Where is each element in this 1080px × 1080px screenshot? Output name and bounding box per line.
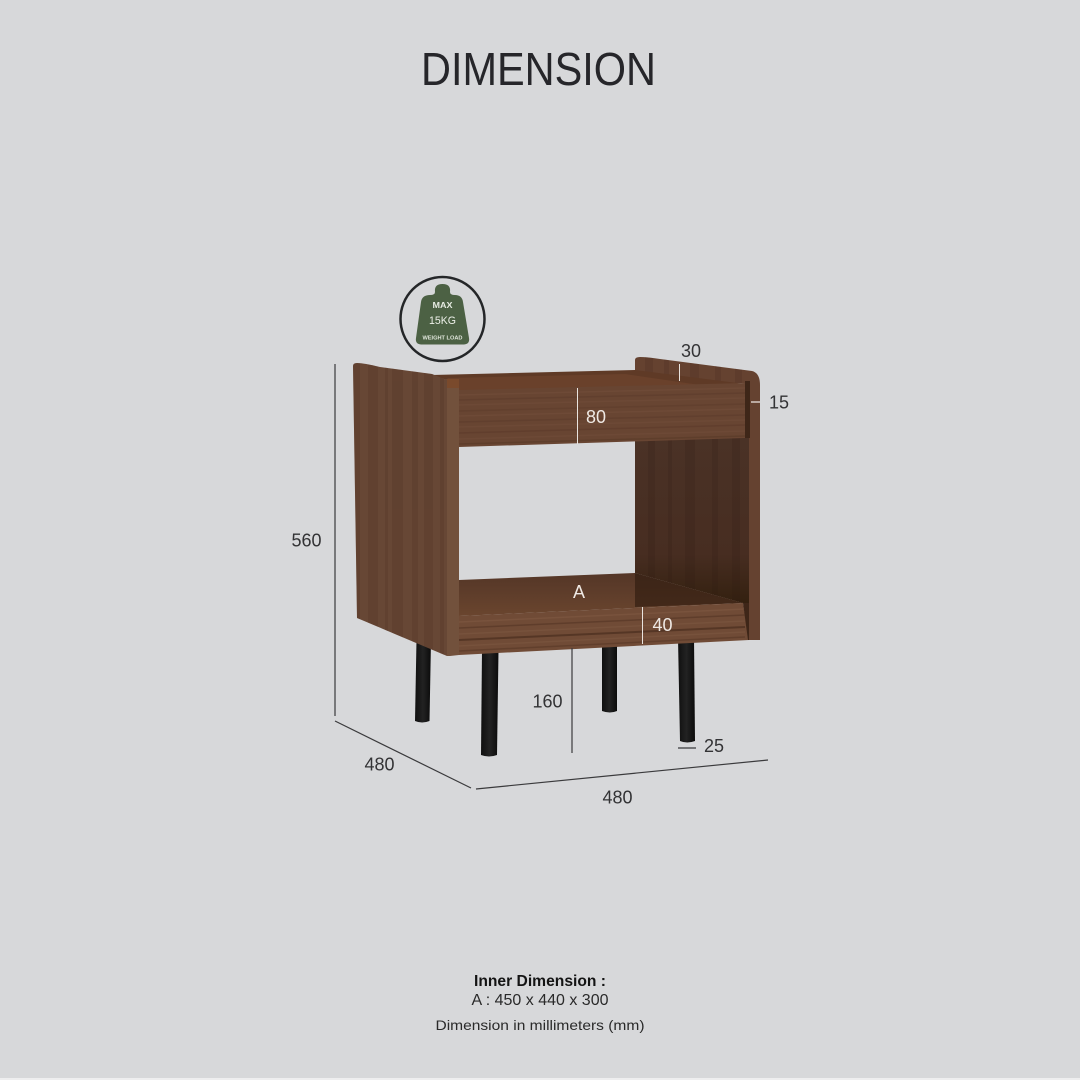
dimension lines: [335, 364, 768, 789]
inner dimension heading: Inner Dimension :: [474, 973, 606, 990]
left panel front edge: [447, 379, 459, 656]
back panel and right side panel: [635, 355, 760, 640]
leg height line: [571, 648, 573, 753]
leg diameter line: [678, 747, 696, 749]
bottom edge strip: [0, 1078, 1080, 1080]
dimension labels: [291, 341, 789, 808]
lower shelf top: [459, 573, 743, 616]
units note: Dimension in millimeters (mm): [436, 1017, 644, 1033]
leg: front left: [481, 650, 498, 756]
icon: weight: [416, 284, 469, 344]
leg: back left: [415, 640, 431, 722]
badge text: weight load: WEIGHT LOAD: [422, 336, 463, 342]
inner dimension values: A : 450 x 440 x 300: [472, 992, 609, 1009]
label: 25: 25: [704, 736, 724, 756]
panel thickness line: [751, 401, 760, 403]
shelf end shadow: [743, 603, 749, 640]
depth line: [335, 721, 471, 788]
label: 40: 40: [652, 615, 673, 635]
legs: [415, 638, 695, 756]
top rail height line: [678, 364, 680, 381]
inner back wall: [635, 436, 750, 606]
top drawer front: [459, 381, 750, 447]
left side panel: [353, 360, 447, 660]
badge text: max: MAX: [432, 301, 453, 310]
lower shelf front: [459, 603, 749, 655]
height line: [334, 364, 336, 716]
title: DIMENSION: [421, 43, 656, 95]
shelf height line: [642, 607, 644, 644]
drawer height line: [576, 388, 578, 444]
label: 80: 80: [586, 407, 606, 427]
badge ring: [400, 277, 484, 361]
badge text: 15kg: 15KG: [429, 315, 456, 327]
leg: back right: [602, 642, 617, 712]
label: 30: 30: [681, 341, 701, 361]
nightstand product illustration: [353, 355, 760, 756]
width line: [476, 760, 768, 789]
label: 560: 560: [291, 530, 322, 550]
leg: front right: [678, 638, 695, 742]
top surface: [432, 370, 745, 391]
label: width 480: 480: [602, 788, 633, 808]
weight load badge: [400, 277, 484, 361]
footer notes: [436, 973, 644, 1033]
label: 15: 15: [769, 392, 789, 412]
label: depth 480: 480: [364, 754, 395, 774]
drawer end shadow: [745, 381, 750, 438]
label: 160: 160: [532, 692, 563, 712]
label: A: A: [573, 582, 585, 602]
